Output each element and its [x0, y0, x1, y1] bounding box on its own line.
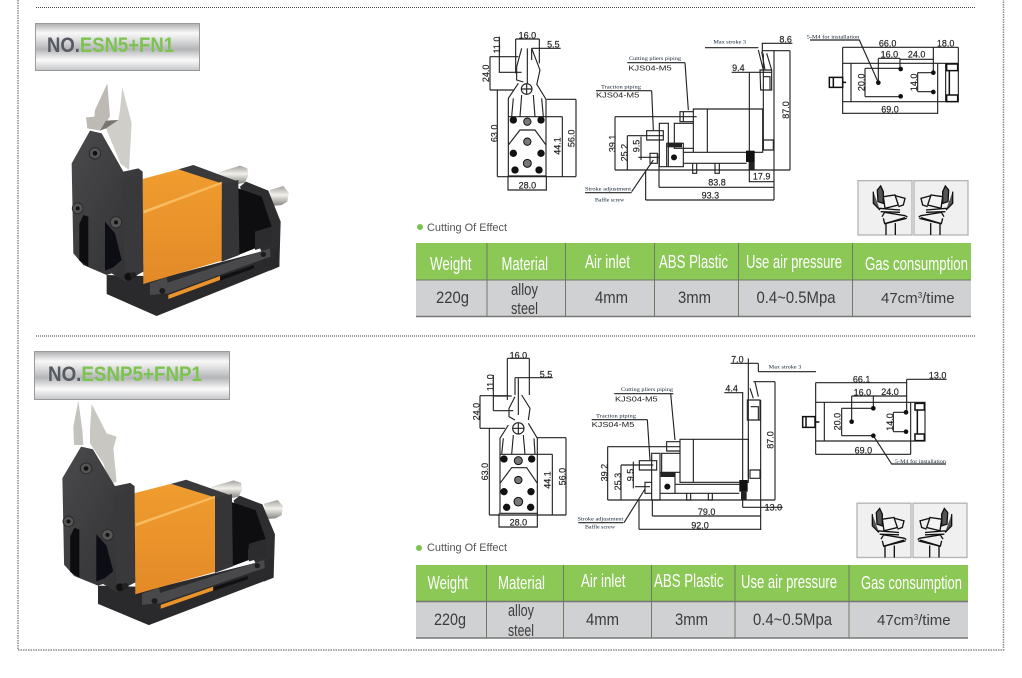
- side view: 9.5: [631, 140, 641, 152]
- top view: 5-M4 for installation: [895, 458, 946, 465]
- technical drawing: ESNP5 dimensions: [471, 350, 947, 531]
- side view: 9.4: [732, 63, 745, 73]
- spec table: steel: [511, 300, 538, 318]
- spec table: [416, 565, 968, 640]
- top view: 13.0: [929, 370, 946, 380]
- front view: 56.0: [567, 130, 577, 147]
- side view: 83.8: [708, 178, 726, 188]
- side view: Max stroke 3: [769, 364, 802, 370]
- spec table: 220g: [434, 611, 466, 629]
- spec table: alloy: [511, 281, 539, 299]
- spec table: ABS Plastic: [654, 571, 724, 591]
- title badge: NO.ESN5+FN1: [36, 24, 200, 70]
- top view: 66.1: [853, 374, 870, 384]
- front view: [471, 350, 567, 528]
- spec table: 0.4~0.5Mpa: [756, 289, 836, 307]
- side view: KJS04-M5: [628, 63, 672, 72]
- spec table: 220g: [436, 289, 469, 307]
- side view: Stroke adjustment: [585, 187, 632, 193]
- cutting effect thumbnails: [858, 181, 968, 235]
- top view: 69.0: [855, 445, 872, 455]
- top view: 20.0: [833, 413, 843, 430]
- side view: 13.0: [765, 503, 782, 513]
- spec table: Weight: [428, 573, 468, 593]
- side view: Cutting pliers piping: [621, 387, 673, 393]
- spec table: Use air pressure: [741, 572, 837, 592]
- side view: 7.0: [731, 354, 744, 364]
- front view: [481, 30, 577, 191]
- top view: 24.0: [908, 50, 925, 60]
- top view: [807, 33, 958, 115]
- front view: 24.0: [481, 65, 491, 82]
- side view: 25.2: [620, 144, 630, 161]
- label: Cutting Of Effect: Cutting Of Effect: [427, 222, 507, 234]
- front view: 16.0: [519, 30, 536, 40]
- side view: [585, 34, 792, 204]
- side view: Traction piping: [596, 414, 636, 420]
- spec table: [416, 243, 971, 318]
- product photo: cutter ESN5: [72, 83, 289, 316]
- side view: 87.0: [766, 431, 776, 449]
- side view: 39.1: [607, 135, 617, 152]
- top view: 14.0: [909, 74, 919, 91]
- spec table: steel: [508, 622, 534, 640]
- top view: 5-M4 for installation: [807, 33, 860, 40]
- side view: Traction piping: [601, 85, 641, 91]
- front view: 44.1: [543, 471, 553, 489]
- spec table: ABS Plastic: [659, 252, 728, 272]
- side view: 92.0: [691, 520, 709, 530]
- top view: 14.0: [885, 413, 895, 431]
- spec table: 3: [918, 291, 923, 300]
- front view: 5.5: [540, 370, 552, 380]
- spec table: 3: [914, 613, 919, 622]
- front view: 63.0: [489, 125, 499, 142]
- side view: 25.3: [613, 473, 623, 490]
- panel: ESN5+FN1: [36, 24, 971, 318]
- side view: 87.0: [781, 101, 791, 119]
- spec table: 3mm: [678, 289, 711, 307]
- side view: [577, 354, 816, 531]
- spec table: Gas consumption: [865, 254, 968, 274]
- front view: 28.0: [510, 518, 527, 528]
- side view: Baffle screw: [595, 197, 624, 204]
- front view: 16.0: [510, 350, 527, 360]
- front view: 11.0: [485, 374, 495, 391]
- spec table: Air inlet: [581, 571, 626, 591]
- side view: 39.2: [600, 464, 610, 481]
- side view: Max stroke 3: [713, 39, 746, 45]
- spec table: Material: [498, 573, 545, 593]
- front view: 28.0: [519, 181, 536, 191]
- top view: 16.0: [854, 388, 871, 398]
- top view: 18.0: [937, 39, 954, 49]
- front view: 24.0: [471, 403, 481, 420]
- spec table: 4mm: [586, 611, 619, 629]
- top view: 24.0: [881, 387, 899, 397]
- spec table: 47cm: [877, 612, 914, 629]
- side view: 9.5: [625, 469, 635, 481]
- side view: KJS04-M5: [592, 420, 634, 429]
- spec table: Gas consumption: [861, 573, 962, 593]
- side view: 79.0: [698, 507, 715, 517]
- side view: 8.6: [779, 34, 792, 44]
- side view: KJS04-M5: [596, 91, 639, 100]
- side view: 93.3: [702, 190, 719, 200]
- spec table: alloy: [508, 602, 535, 620]
- front view: 11.0: [492, 37, 502, 53]
- title badge: NO.ESNP5+FNP1: [34, 352, 230, 400]
- title badge: NO.ESN5+FN1: NO.ESN5+FN1: [47, 34, 174, 57]
- side view: 17.9: [753, 172, 770, 182]
- spec table: 0.4~0.5Mpa: [753, 611, 833, 629]
- top view: 20.0: [856, 74, 866, 91]
- side view: 4.4: [725, 384, 738, 394]
- front view: 44.1: [553, 137, 563, 155]
- cutting effect thumbnails: [857, 503, 967, 557]
- spec table: 4mm: [595, 289, 628, 307]
- spec table: 47cm: [881, 290, 918, 307]
- side view: Stroke adjustment: [577, 517, 624, 523]
- spec table: Air inlet: [585, 252, 630, 272]
- top view: 66.0: [879, 39, 896, 49]
- side view: Cutting pliers piping: [629, 56, 681, 62]
- spec table: Use air pressure: [746, 252, 842, 272]
- top view: 16.0: [881, 50, 898, 60]
- top view: [803, 370, 947, 465]
- side view: KJS04-M5: [615, 394, 658, 403]
- front view: 5.5: [547, 39, 560, 49]
- technical drawing: ESN5 dimensions: [481, 30, 958, 204]
- side view: Baffle screw: [585, 524, 615, 531]
- spec table: /time: [918, 612, 951, 629]
- title badge: NO.ESNP5+FNP1: NO.ESNP5+FNP1: [48, 363, 202, 386]
- front view: 63.0: [480, 463, 490, 480]
- spec table: Weight: [430, 254, 472, 274]
- product photo: cutter ESNP5: [62, 401, 283, 625]
- panel: ESNP5+FNP1: [34, 350, 968, 640]
- label: Cutting Of Effect: Cutting Of Effect: [427, 542, 507, 554]
- top view: 69.0: [881, 105, 899, 115]
- front view: 56.0: [557, 468, 567, 485]
- spec table: /time: [922, 290, 955, 307]
- spec table: 3mm: [675, 611, 708, 629]
- spec table: Material: [502, 254, 548, 274]
